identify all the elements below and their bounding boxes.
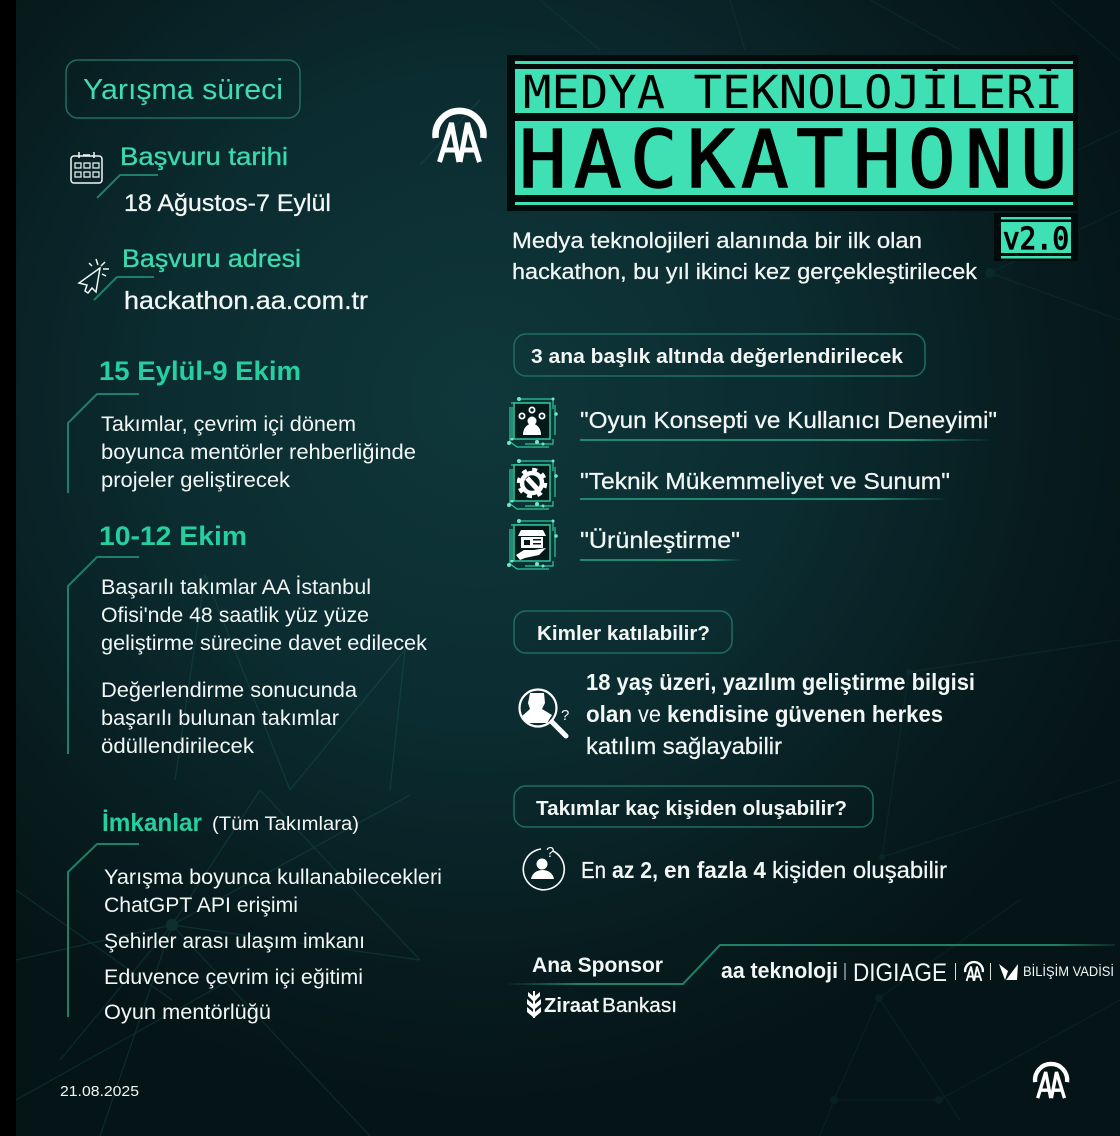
application address block: Başvuru adresi [122,245,301,273]
facilities block: Oyun mentörlüğü [104,1001,271,1024]
version badge: v2.0 [1003,222,1069,257]
title block [507,55,1078,211]
logo: AA top [436,111,484,162]
facilities block: Şehirler arası ulaşım imkanı [104,930,365,953]
application date block [97,143,331,217]
subtitle: hackathon, bu yıl ikinci kez gerçekleştirilecek [512,259,978,284]
timeline block: 10-12 Ekim [68,521,428,758]
title line 2: HACKATHONU [519,114,1068,206]
timeline block: 10-12 Ekim: ödüllendirilecek [101,735,255,758]
eligibility text: katılım sağlayabilir [586,733,782,759]
logo: AA bottom [1035,1064,1067,1098]
application date block: Başvuru tarihi [120,143,288,171]
left black bar [0,0,16,1136]
criterion 2: "Teknik Mükemmeliyet ve Sunum" [580,468,950,494]
pill heading: who can join [514,611,732,653]
subtitle [512,228,978,284]
timeline block: 15 Eylül-9 Ekim [68,356,416,493]
facilities block: İmkanlar [102,809,202,837]
date: 21.08.2025 [60,1084,139,1100]
pill heading: team size [514,786,873,827]
team size text: kişiden oluşabilir [772,857,947,883]
icon: product [507,519,558,569]
timeline block: 10-12 Ekim: geliştirme sürecine davet edilecek [101,632,428,655]
timeline block: 10-12 Ekim: başarılı bulunan takımlar [101,707,339,730]
facilities block: Eduvence çevrim içi eğitimi [104,966,363,989]
eligibility text: olan [586,701,632,727]
pill heading: evaluation: 3 ana başlık altında değerlendirilecek [531,346,904,368]
facilities block: ChatGPT API erişimi [104,894,298,917]
application address block: hackathon.aa.com.tr [124,287,368,315]
timeline block: 10-12 Ekim: Değerlendirme sonucunda [101,679,357,702]
facilities block: (Tüm Takımlara) [212,814,359,835]
sponsor divider line [505,945,1115,984]
team size text: en fazla 4 [664,857,766,883]
timeline block: 15 Eylül-9 Ekim: boyunca mentörler rehberliğinde [101,441,416,464]
icon: magnifier person [520,690,569,736]
eligibility text: ve [638,701,661,727]
logo: AA small [965,962,983,981]
facilities block: Yarışma boyunca kullanabilecekleri [104,866,442,889]
title line 1: MEDYA TEKNOLOJİLERİ [523,66,1063,119]
criterion 3: "Ürünleştirme" [580,527,740,553]
eligibility text: kendisine güvenen herkes [667,701,943,727]
partner logos: aa teknoloji [721,958,838,983]
main sponsor: Bankası [602,995,677,1017]
icon: person with question: ? [546,844,554,861]
timeline block: 15 Eylül-9 Ekim: Takımlar, çevrim içi dönem [101,413,356,436]
partner logos [721,958,1114,987]
pill heading: team size: Takımlar kaç kişiden oluşabilir? [536,798,847,820]
timeline block: 15 Eylül-9 Ekim: projeler geliştirecek [101,469,291,492]
main sponsor: Ziraat [544,995,599,1017]
icon: magnifier person: ? [561,707,569,724]
icon: game concept [507,397,558,447]
background network pattern right [540,0,1120,1136]
application address block [94,245,368,315]
background network pattern left [16,100,480,1136]
version badge [994,213,1078,261]
partner logos: DIGIAGE [853,959,947,987]
partner logos: BİLİŞİM VADİSİ [1023,964,1114,979]
main sponsor: Ana Sponsor [532,954,663,977]
pill heading: who can join: Kimler katılabilir? [537,623,710,645]
pill heading: Yarışma süreci: Yarışma süreci [83,74,283,106]
criterion 1: "Oyun Konsepti ve Kullanıcı Deneyimi" [580,407,997,433]
application date block: 18 Ağustos-7 Eylül [124,190,331,217]
main sponsor [527,954,677,1018]
timeline block: 10-12 Ekim: 10-12 Ekim [99,521,247,551]
timeline block: 10-12 Ekim: Ofisi'nde 48 saatlik yüz yüze [101,604,369,627]
timeline block: 15 Eylül-9 Ekim: 15 Eylül-9 Ekim [99,356,301,386]
team size text [581,857,947,883]
subtitle: Medya teknolojileri alanında bir ilk olan [512,228,922,253]
timeline block: 10-12 Ekim: Başarılı takımlar AA İstanbul [101,576,371,599]
pill heading: evaluation [514,334,925,376]
team size text: En [581,857,606,883]
eligibility text: 18 yaş üzeri, yazılım geliştirme bilgisi [586,669,975,695]
team size text: az 2, [612,857,658,883]
facilities block [68,809,442,1024]
icon: technical gear [507,459,558,509]
icon: cursor click [79,259,109,293]
icon: calendar [71,152,102,183]
pill heading: Yarışma süreci [66,60,300,118]
logo: Bilişim Vadisi [999,964,1018,980]
icon: wheat [527,991,541,1018]
eligibility text [586,669,975,759]
icon: person with question [523,844,564,890]
